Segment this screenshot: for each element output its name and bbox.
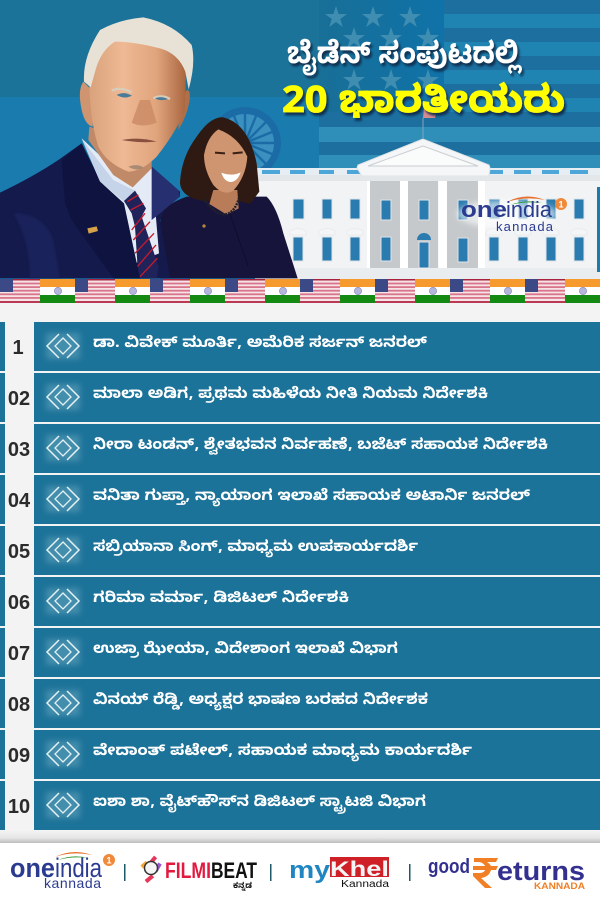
illustration: white house <box>255 108 600 279</box>
row 7: 07 <box>8 643 30 665</box>
row 7 <box>0 628 600 677</box>
row 4: 04 <box>8 490 31 512</box>
hair <box>84 17 193 89</box>
logo: oneindia kannada watermark: kannada <box>496 219 554 234</box>
footer band <box>0 830 600 899</box>
photo: kamala harris <box>160 117 298 278</box>
row 4: ವನಿತಾ ಗುಪ್ತಾ, ನ್ಯಾಯಾಂಗ ಇಲಾಖೆ ಸಹಾಯಕ ಅಟಾರ್ನಿ ಜನರಲ್ <box>93 487 531 509</box>
face <box>89 33 186 172</box>
row 10 <box>0 781 600 830</box>
logo: mykhel: my <box>289 857 331 884</box>
logo: filmibeat: ಕನ್ನಡ <box>233 881 252 893</box>
row 3: 03 <box>8 439 30 461</box>
row 8 <box>0 679 600 728</box>
tie <box>124 191 159 278</box>
divider <box>409 864 410 881</box>
row 3 <box>0 424 600 473</box>
logo: oneindia kannada watermark <box>457 196 567 234</box>
logo: oneindia kannada watermark: india <box>506 197 553 222</box>
logo: mykhel: Kannada <box>341 879 390 890</box>
row 6: 06 <box>8 592 30 614</box>
row 1: ಡಾ. ವಿವೇಕ್ ಮೂರ್ತಿ, ಅಮೆರಿಕ ಸರ್ಜನ್ ಜನರಲ್ <box>93 334 428 356</box>
brows and eyes <box>112 89 170 99</box>
logo: oneindia: india <box>55 853 103 883</box>
logo: mykhel: Khel <box>330 858 389 881</box>
logo: goodreturns: good <box>428 856 470 878</box>
logo: oneindia kannada watermark: 1 <box>558 200 564 210</box>
logo: goodreturns: eturns <box>497 856 585 886</box>
row 8: ವಿನಯ್ ರೆಡ್ಡಿ, ಅಧ್ಯಕ್ಷರ ಭಾಷಣ ಬರಹದ ನಿರ್ದೇಶಕ <box>93 691 428 713</box>
row 8: 08 <box>8 694 30 716</box>
row 2 <box>0 373 600 422</box>
row 3: ನೀರಾ ಟಂಡನ್, ಶ್ವೇತಭವನ ನಿರ್ವಹಣೆ, ಬಜೆಟ್ ಸಹಾಯಕ ನಿರ್ದೇಶಕಿ <box>93 436 548 458</box>
logo: goodreturns <box>428 856 586 891</box>
windows <box>293 199 584 268</box>
row 9 <box>0 730 600 779</box>
logo: mykhel <box>289 857 390 890</box>
list panel <box>0 322 600 830</box>
flag backdrop stripes <box>319 0 600 168</box>
icon: ashoka chakra <box>209 107 281 179</box>
logo: oneindia: one <box>10 853 55 883</box>
ears <box>80 82 95 127</box>
row 5: ಸಬ್ರಿಯಾನಾ ಸಿಂಗ್, ಮಾಧ್ಯಮ ಉಪಕಾರ್ಯದರ್ಶಿ <box>93 538 418 560</box>
row 5 <box>0 526 600 575</box>
row 4 <box>0 475 600 524</box>
title line 2: 20 ಭಾರತೀಯರು <box>282 81 565 133</box>
divider <box>270 864 272 881</box>
row 10: ಐಶಾ ಶಾ, ವೈಟ್‌ಹೌಸ್‌ನ ಡಿಜಿಟಲ್ ಸ್ಟ್ರಾಟಜಿ ವಿಭಾಗ <box>93 793 426 815</box>
row 9: ವೇದಾಂತ್ ಪಟೇಲ್, ಸಹಾಯಕ ಮಾಧ್ಯಮ ಕಾರ್ಯದರ್ಶಿ <box>93 742 472 764</box>
lapels <box>62 143 140 278</box>
neck <box>88 127 152 187</box>
nose and mouth <box>132 100 157 125</box>
flag strip <box>0 279 600 303</box>
row 6 <box>0 577 600 626</box>
row 2: ಮಾಲಾ ಅಡಿಗ, ಪ್ರಥಮ ಮಹಿಳೆಯ ನೀತಿ ನಿಯಮ ನಿರ್ದೇಶಕಿ <box>93 385 488 407</box>
portico <box>367 180 485 268</box>
logo: goodreturns: KANNADA <box>534 881 586 891</box>
logo: filmibeat <box>140 856 257 893</box>
logo: oneindia <box>10 852 115 891</box>
title line 1: ಬೈಡೆನ್ ಸಂಪುಟದಲ್ಲಿ <box>287 38 522 80</box>
row 5: 05 <box>8 541 30 563</box>
row 7: ಉಜ್ರಾ ಝೇಯಾ, ವಿದೇಶಾಂಗ ಇಲಾಖೆ ವಿಭಾಗ <box>93 640 398 662</box>
photo: joe biden <box>0 17 193 278</box>
panel: header banner <box>0 0 600 303</box>
window lintels <box>290 228 587 235</box>
row 1 <box>0 322 600 371</box>
logo: oneindia kannada watermark: one <box>461 197 507 222</box>
row 1: 1 <box>12 337 24 359</box>
shirt <box>82 138 159 263</box>
suit <box>0 143 180 278</box>
row 2: 02 <box>8 388 30 410</box>
row 6: ಗರಿಮಾ ವರ್ಮಾ, ಡಿಜಿಟಲ್ ನಿರ್ದೇಶಕಿ <box>93 589 349 611</box>
logo: oneindia: kannada <box>44 875 101 891</box>
row 9: 09 <box>8 745 30 767</box>
logo: filmibeat: BEAT <box>211 858 257 883</box>
logo: filmibeat: FILMI <box>165 858 211 883</box>
logo: oneindia: 1 <box>106 856 112 866</box>
divider <box>124 864 126 881</box>
row 10: 10 <box>8 796 30 818</box>
